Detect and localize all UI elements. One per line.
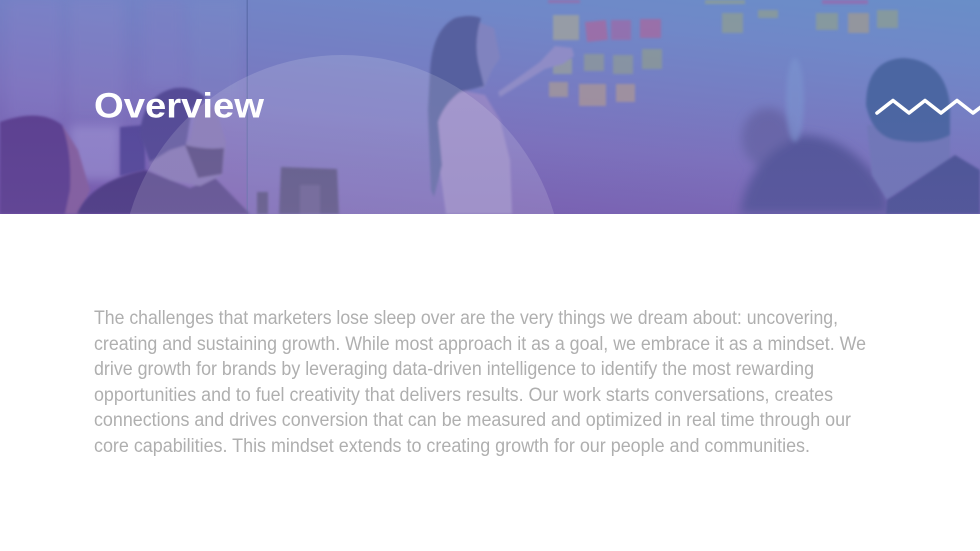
man from behind right <box>866 58 950 200</box>
office wall edge <box>246 0 248 214</box>
seated person left <box>0 116 90 214</box>
desk objects <box>257 167 339 214</box>
coat on wall <box>786 58 804 142</box>
header photo banner <box>0 0 980 214</box>
body paragraph: The challenges that marketers lose sleep over are the very things we dream about: uncovering, <box>94 308 838 329</box>
body paragraph: creating and sustaining growth. While most approach it as a goal, we embrace it as a mindset. We <box>94 334 866 355</box>
seated man with beard <box>77 88 250 214</box>
body paragraph: core capabilities. This mindset extends to creating growth for our people and communities. <box>94 436 810 457</box>
body paragraph: connections and drives conversion that can be measured and optimized in real time through our <box>94 410 852 431</box>
translucent circle <box>130 55 554 214</box>
icon: zigzag wave <box>877 100 980 113</box>
presenter <box>428 16 574 214</box>
body paragraph: drive growth for brands by leveraging data-driven intelligence to identify the most rewarding <box>94 359 814 380</box>
blurred person right <box>740 108 890 214</box>
chair <box>120 125 145 176</box>
body paragraph <box>94 308 866 457</box>
title: Overview <box>94 86 265 126</box>
office windows <box>68 120 120 183</box>
sticky notes <box>548 0 898 106</box>
bottom purple tint <box>81 206 978 212</box>
body paragraph: opportunities and to fuel creativity that delivers results. Our work starts conversations, creates <box>94 385 833 406</box>
